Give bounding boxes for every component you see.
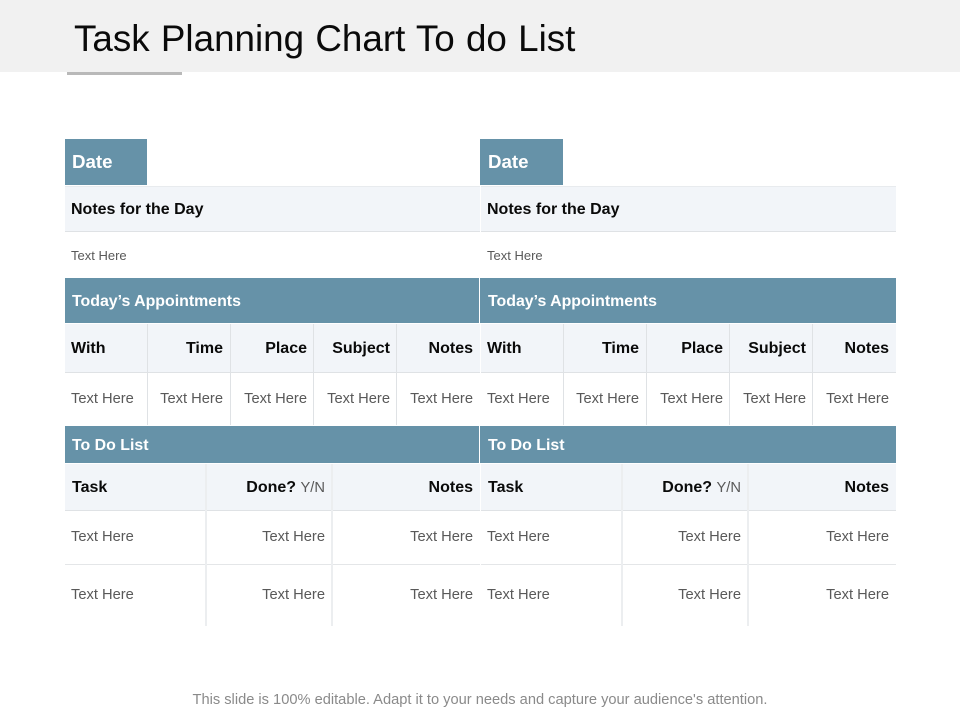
- to do header: To Do List: [72, 437, 148, 454]
- appointments column headers: With: [487, 340, 522, 357]
- to do column headers: Task: [488, 479, 523, 496]
- to do column headers: Done? Y/N: [246, 479, 325, 496]
- to do column headers: Task: [72, 479, 107, 496]
- to do row 2: [71, 587, 473, 603]
- to do row 1: Text Here: [678, 529, 741, 545]
- to do row 1: Text Here: [262, 529, 325, 545]
- appointments column headers: Subject: [332, 340, 390, 357]
- appointments row: Text Here: [826, 391, 889, 407]
- to do header: [65, 426, 479, 463]
- title: Task Planning Chart To do List: [74, 18, 575, 59]
- notes text: Text Here: [487, 248, 543, 263]
- panel: right day planner: [480, 139, 896, 626]
- appointments row: [487, 391, 889, 407]
- to do row 2: [487, 587, 889, 603]
- appointments column headers: Place: [265, 340, 307, 357]
- to do row 2: Text Here: [410, 587, 473, 603]
- notes text: Text Here: [71, 248, 127, 263]
- notes heading row: Notes for the Day: [487, 201, 619, 218]
- to do row 1: Text Here: [410, 529, 473, 545]
- appointments column headers: Time: [186, 340, 223, 357]
- date label: [480, 139, 563, 185]
- date label: Date: [488, 151, 529, 172]
- title banner: [0, 0, 960, 72]
- appointments column headers: Notes: [845, 340, 889, 357]
- to do row 1: Text Here: [487, 529, 550, 545]
- appointments column headers: Subject: [748, 340, 806, 357]
- notes heading row: Notes for the Day: [71, 201, 203, 218]
- appointments row: Text Here: [487, 391, 550, 407]
- appointments column headers: Place: [681, 340, 723, 357]
- appointments row: Text Here: [71, 391, 134, 407]
- to do row 2: Text Here: [262, 587, 325, 603]
- appointments column headers: [65, 324, 480, 373]
- appointments column headers: Notes: [429, 340, 473, 357]
- appointments column headers: Time: [602, 340, 639, 357]
- footer note: This slide is 100% editable. Adapt it to your needs and capture your audience's attention.: [193, 692, 767, 708]
- to do row 2: Text Here: [678, 587, 741, 603]
- to do row 2: Text Here: [487, 587, 550, 603]
- to do column headers: Notes: [429, 479, 473, 496]
- appointments row: Text Here: [576, 391, 639, 407]
- appointments header: [480, 278, 896, 323]
- to do row 1: [65, 511, 480, 565]
- appointments header: Today’s Appointments: [72, 293, 241, 310]
- appointments row: [71, 391, 473, 407]
- to do column headers: [481, 464, 896, 511]
- appointments column headers: With: [71, 340, 106, 357]
- appointments row: Text Here: [743, 391, 806, 407]
- appointments row: Text Here: [660, 391, 723, 407]
- panel: left day planner: [65, 139, 480, 626]
- appointments header: [65, 278, 479, 323]
- to do column headers: [65, 464, 480, 511]
- to do row 1: Text Here: [826, 529, 889, 545]
- to do row 1: Text Here: [71, 529, 134, 545]
- to do row 2: Text Here: [71, 587, 134, 603]
- to do column headers: Notes: [845, 479, 889, 496]
- to do row 1: [481, 511, 896, 565]
- appointments header: Today’s Appointments: [488, 293, 657, 310]
- date label: [65, 139, 147, 185]
- date label: Date: [72, 151, 113, 172]
- title underline accent: [67, 72, 182, 75]
- to do header: [480, 426, 896, 463]
- to do column headers: Done? Y/N: [662, 479, 741, 496]
- appointments column headers: [481, 324, 896, 373]
- appointments row: Text Here: [327, 391, 390, 407]
- to do row 2: Text Here: [826, 587, 889, 603]
- notes heading row: [65, 186, 480, 232]
- to do header: To Do List: [488, 437, 564, 454]
- appointments row: Text Here: [244, 391, 307, 407]
- appointments row: Text Here: [410, 391, 473, 407]
- appointments row: Text Here: [160, 391, 223, 407]
- notes heading row: [481, 186, 896, 232]
